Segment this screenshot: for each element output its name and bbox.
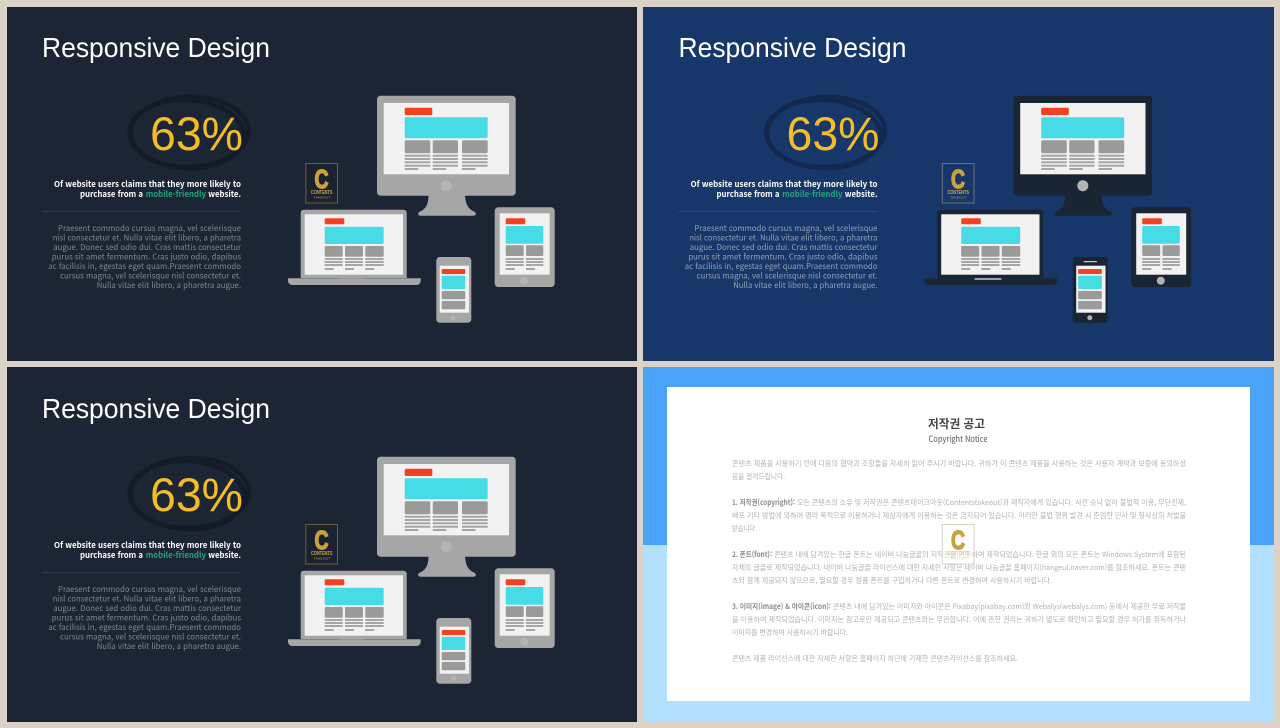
notice section 1: copyright: 모든 콘텐츠의 소유 및 저작권은 콘텐츠테이크아웃(Contentstakeout)과 제작자에게 있습니다. 사전 승낙 없이 불법적 이용, 무단전재,	[797, 497, 1186, 508]
body paragraph: purus sit amet fermentum. Cras justo odio, dapibus	[688, 250, 878, 262]
notice section 2: font: 자체의 글꼴로 제작되었습니다. 네이버 나눔글꼴 라이선스에 대한 자세한 사항은 네이버 나눔글꼴 홈페이지(hangeul.naver.com)를 참조하세요. 폰트는 콘텐	[732, 562, 1186, 573]
lead text: mobile-friendly	[146, 549, 206, 561]
notice subheading: Copyright Notice	[928, 433, 988, 445]
body paragraph: nisl consectetur et. Nulla vitae elit libero, a pharetra	[53, 232, 241, 244]
logo badge: CONTENTS	[311, 551, 333, 557]
body paragraph: Nulla vitae elit libero, a pharetra augue.	[97, 279, 241, 291]
notice section 3: image and icon	[732, 601, 1186, 638]
notice intro: 콘텐츠 제품을 사용하기 전에 다음의 협약과 조항들을 자세히 읽어 주시기 바랍니다. 귀하가 이 콘텐츠 제품을 사용하는 것은 사용자 계약과 보증에 동의하셨	[732, 458, 1186, 469]
logo badge: TAKEOUT	[314, 556, 331, 560]
body paragraph: augue. Donec sed odio dui. Cras mattis consectetur	[690, 241, 878, 253]
body paragraph: Praesent commodo cursus magna, vel scelerisque	[694, 222, 878, 234]
body paragraph: cursus magna, vel scelerisque nisl consectetur et.	[60, 630, 241, 642]
body paragraph	[48, 222, 242, 291]
lead text: purchase from a	[80, 549, 143, 561]
notice intro: 음을 알려드립니다.	[732, 471, 785, 482]
logo badge: C	[314, 164, 329, 194]
body paragraph: ac facilisis in, egestas eget quam.Praesent commodo	[48, 260, 241, 272]
logo badge: CONTENTS	[948, 551, 970, 557]
icon: phone	[436, 257, 471, 323]
body paragraph: nisl consectetur et. Nulla vitae elit libero, a pharetra	[53, 592, 241, 604]
logo badge: TAKEOUT	[314, 196, 331, 200]
notice section 3: image and icon: 콘텐츠 내에 담겨있는 이미지와 아이콘은 Pixabay(pixabay.com)와 Webalys(webalys.com) 등에서 제공한 무료 저작물	[833, 601, 1186, 612]
body paragraph: ac facilisis in, egestas eget quam.Praesent commodo	[685, 260, 878, 272]
panel: responsive design, navy	[643, 7, 1274, 361]
statistic: 63%: 63%	[786, 107, 880, 160]
logo badge: C	[951, 164, 965, 194]
icon: tablet	[495, 207, 555, 287]
body paragraph: augue. Donec sed odio dui. Cras mattis consectetur	[53, 241, 242, 253]
panel: responsive design, dark copy	[7, 367, 637, 722]
body paragraph: purus sit amet fermentum. Cras justo odio, dapibus	[52, 250, 241, 262]
lead text: Of website users claims that they more likely to	[54, 178, 241, 190]
body paragraph: augue. Donec sed odio dui. Cras mattis consectetur	[53, 602, 242, 614]
lead text: purchase from a	[80, 188, 143, 200]
logo badge: TAKEOUT	[950, 556, 967, 560]
body paragraph: Praesent commodo cursus magna, vel scelerisque	[58, 583, 241, 595]
body paragraph: ac facilisis in, egestas eget quam.Praesent commodo	[48, 621, 241, 633]
logo badge: C	[951, 525, 965, 555]
logo badge: CONTENTS	[311, 190, 333, 196]
logo badge: C	[314, 525, 329, 555]
notice section 2: font	[732, 549, 1186, 586]
notice heading: 저작권 공고	[928, 415, 985, 432]
logo badge	[942, 524, 974, 564]
notice section 1: copyright: 받습니다.	[732, 523, 757, 534]
body paragraph: cursus magna, vel scelerisque nisl consectetur et.	[60, 270, 241, 282]
lead text: Of website users claims that they more likely to	[690, 178, 878, 190]
body paragraph: purus sit amet fermentum. Cras justo odio, dapibus	[52, 612, 241, 624]
statistic: 63%: 63%	[150, 468, 243, 521]
logo badge	[942, 164, 974, 203]
notice section 2: font: 2. 폰트(font):	[732, 549, 772, 560]
lead text	[54, 539, 241, 561]
body paragraph: Nulla vitae elit libero, a pharetra augue.	[733, 279, 878, 291]
notice section 3: image and icon: 3. 이미지(image) & 아이콘(icon):	[732, 601, 831, 612]
statistic: 63%: 63%	[150, 107, 243, 160]
lead text: website.	[845, 188, 878, 200]
logo badge: TAKEOUT	[950, 196, 967, 200]
lead text: mobile-friendly	[782, 188, 843, 200]
icon: desktop monitor	[377, 96, 516, 216]
icon: phone	[1073, 257, 1108, 323]
lead text	[690, 178, 878, 200]
lead text: mobile-friendly	[146, 188, 206, 200]
logo badge: CONTENTS	[948, 190, 970, 196]
lead text	[54, 178, 241, 200]
notice section 3: image and icon: 이미지를 변경하여 사용하시기 바랍니다.	[732, 627, 848, 638]
notice section 1: copyright: 1. 저작권(copyright):	[732, 497, 795, 508]
body paragraph	[685, 222, 878, 291]
title: Responsive Design	[42, 32, 270, 63]
icon: phone	[436, 618, 471, 684]
lead text: website.	[208, 549, 241, 561]
icon: laptop	[288, 571, 421, 646]
title: Responsive Design	[678, 32, 906, 63]
notice section 1: copyright	[732, 497, 1186, 534]
body paragraph: Praesent commodo cursus magna, vel scelerisque	[58, 222, 241, 234]
icon: tablet	[495, 568, 555, 648]
lead text: Of website users claims that they more likely to	[54, 539, 241, 551]
icon: desktop monitor	[377, 457, 516, 577]
scribbled ellipse	[128, 95, 250, 171]
lead text: purchase from a	[716, 188, 780, 200]
body paragraph: Nulla vitae elit libero, a pharetra augue.	[97, 640, 241, 652]
logo badge	[306, 164, 338, 203]
body paragraph: cursus magna, vel scelerisque nisl consectetur et.	[696, 270, 878, 282]
title: Responsive Design	[42, 393, 270, 424]
scribbled ellipse	[128, 456, 250, 532]
notice intro	[732, 458, 1186, 482]
body paragraph: nisl consectetur et. Nulla vitae elit libero, a pharetra	[689, 232, 878, 244]
notice section 3: image and icon: 을 이용하여 제작되었습니다. 이미지는 참고로만 제공되고 콘텐츠와는 무관합니다. 이에 관한 권리는 귀하가 별도로 확인하고 필요할 경우 허가를 취득하거나	[732, 614, 1186, 625]
lead text: website.	[208, 188, 241, 200]
notice section 1: copyright: 배포 기타 방법에 의하여 영리 목적으로 이용하거나 제삼자에게 이용하는 것은 금지되어 있습니다. 이러한 불법 행위 발견 시 준엄한 민사 및 형사상의 처벌을	[732, 510, 1186, 521]
body paragraph	[48, 583, 242, 652]
notice section 2: font: 콘텐츠 내에 담겨있는 한글 폰트는 네이버 나눔글꼴의 저작권을 기증하여 제작되었습니다. 한글 외의 모든 폰트는 Windows System에 포함된	[774, 549, 1186, 560]
icon: laptop	[924, 210, 1057, 285]
icon: tablet	[1131, 207, 1191, 287]
logo badge	[306, 524, 338, 564]
scribbled ellipse	[764, 95, 886, 171]
icon: desktop monitor	[1014, 96, 1152, 216]
icon: laptop	[288, 210, 421, 285]
notice section 2: font: 츠와 함께 제공되지 않으므로, 필요할 경우 정품 폰트를 구입하거나 다른 폰트로 변경하여 사용하시기 바랍니다.	[732, 575, 1052, 586]
panel: responsive design, dark	[7, 7, 637, 361]
panel: copyright notice	[643, 367, 1274, 722]
notice footer line: 콘텐츠 제품 라이선스에 대한 자세한 사항은 홈페이지 하단에 기재한 콘텐츠라이선스를 참조하세요.	[732, 653, 1018, 664]
